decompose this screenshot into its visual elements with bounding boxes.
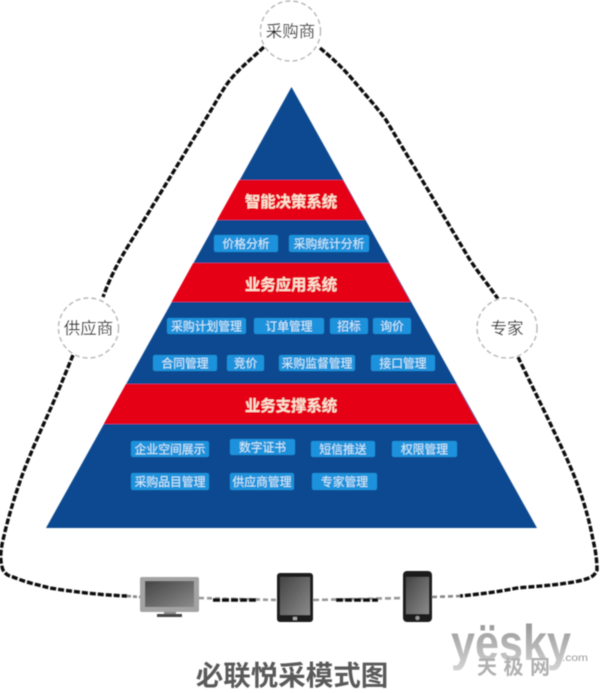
pill: 供应商管理: 供应商管理 <box>232 475 292 489</box>
pill: 采购品目管理: 采购品目管理 <box>135 475 206 489</box>
band: 智能决策系统: 智能决策系统 <box>245 192 337 211</box>
pill: 数字证书 <box>230 439 295 455</box>
band: 业务应用系统: 业务应用系统 <box>245 275 337 294</box>
pill: 招标 <box>330 318 368 334</box>
dashed connection ring <box>1 47 597 596</box>
pill: 合同管理 <box>153 355 217 371</box>
pill: 接口管理: 接口管理 <box>379 356 427 370</box>
pill: 询价: 询价 <box>380 320 404 334</box>
pill: 采购统计分析: 采购统计分析 <box>294 237 365 251</box>
icon: tablet <box>277 573 313 622</box>
pill: 接口管理 <box>371 355 435 371</box>
node: 供应商 <box>58 298 118 358</box>
pill: 价格分析 <box>214 235 278 252</box>
pill: 数字证书: 数字证书 <box>239 440 286 454</box>
pill: 短信推送: 短信推送 <box>319 442 367 456</box>
title: 必联悦采模式图 <box>196 660 388 691</box>
node: 专家: 专家 <box>490 319 524 338</box>
pill: 合同管理: 合同管理 <box>161 356 209 370</box>
band: 智能决策系统 <box>217 180 365 220</box>
pill: 招标: 招标 <box>337 320 361 334</box>
node: 采购商 <box>260 1 320 61</box>
pill: 企业空间展示: 企业空间展示 <box>135 442 206 456</box>
icon: phone <box>403 571 432 622</box>
pill: 竞价: 竞价 <box>234 356 257 370</box>
pill row: 决策 <box>214 235 369 252</box>
pill: 权限管理: 权限管理 <box>401 442 448 456</box>
pill: 采购监督管理: 采购监督管理 <box>282 356 353 370</box>
pill: 短信推送 <box>311 441 375 457</box>
pill: 竞价 <box>227 355 264 371</box>
pill rows: 支撑 <box>131 439 457 490</box>
node: 专家 <box>477 298 537 358</box>
pill: 订单管理: 订单管理 <box>265 320 313 334</box>
pill rows: 应用 <box>153 318 435 371</box>
device links <box>127 596 460 600</box>
pill: 订单管理 <box>254 318 324 334</box>
pill: 专家管理: 专家管理 <box>321 475 368 489</box>
pill: 权限管理 <box>392 441 457 457</box>
pill: 询价 <box>373 318 411 334</box>
pill: 专家管理 <box>312 473 377 490</box>
watermark: yesky: 天极网 <box>477 656 550 679</box>
pill: 采购计划管理: 采购计划管理 <box>171 320 242 334</box>
watermark: yesky: .com <box>562 652 588 664</box>
pyramid <box>46 87 537 528</box>
pyramid base triangle <box>46 87 537 528</box>
node: 供应商: 供应商 <box>64 319 113 338</box>
icon: monitor <box>140 577 199 617</box>
band: 业务支撑系统: 业务支撑系统 <box>245 396 337 415</box>
node: 采购商: 采购商 <box>266 22 315 41</box>
band: 业务应用系统 <box>172 263 410 302</box>
band: 业务支撑系统 <box>104 384 478 424</box>
watermark: yesky: yësky <box>451 615 571 671</box>
pill: 价格分析: 价格分析 <box>222 237 270 251</box>
